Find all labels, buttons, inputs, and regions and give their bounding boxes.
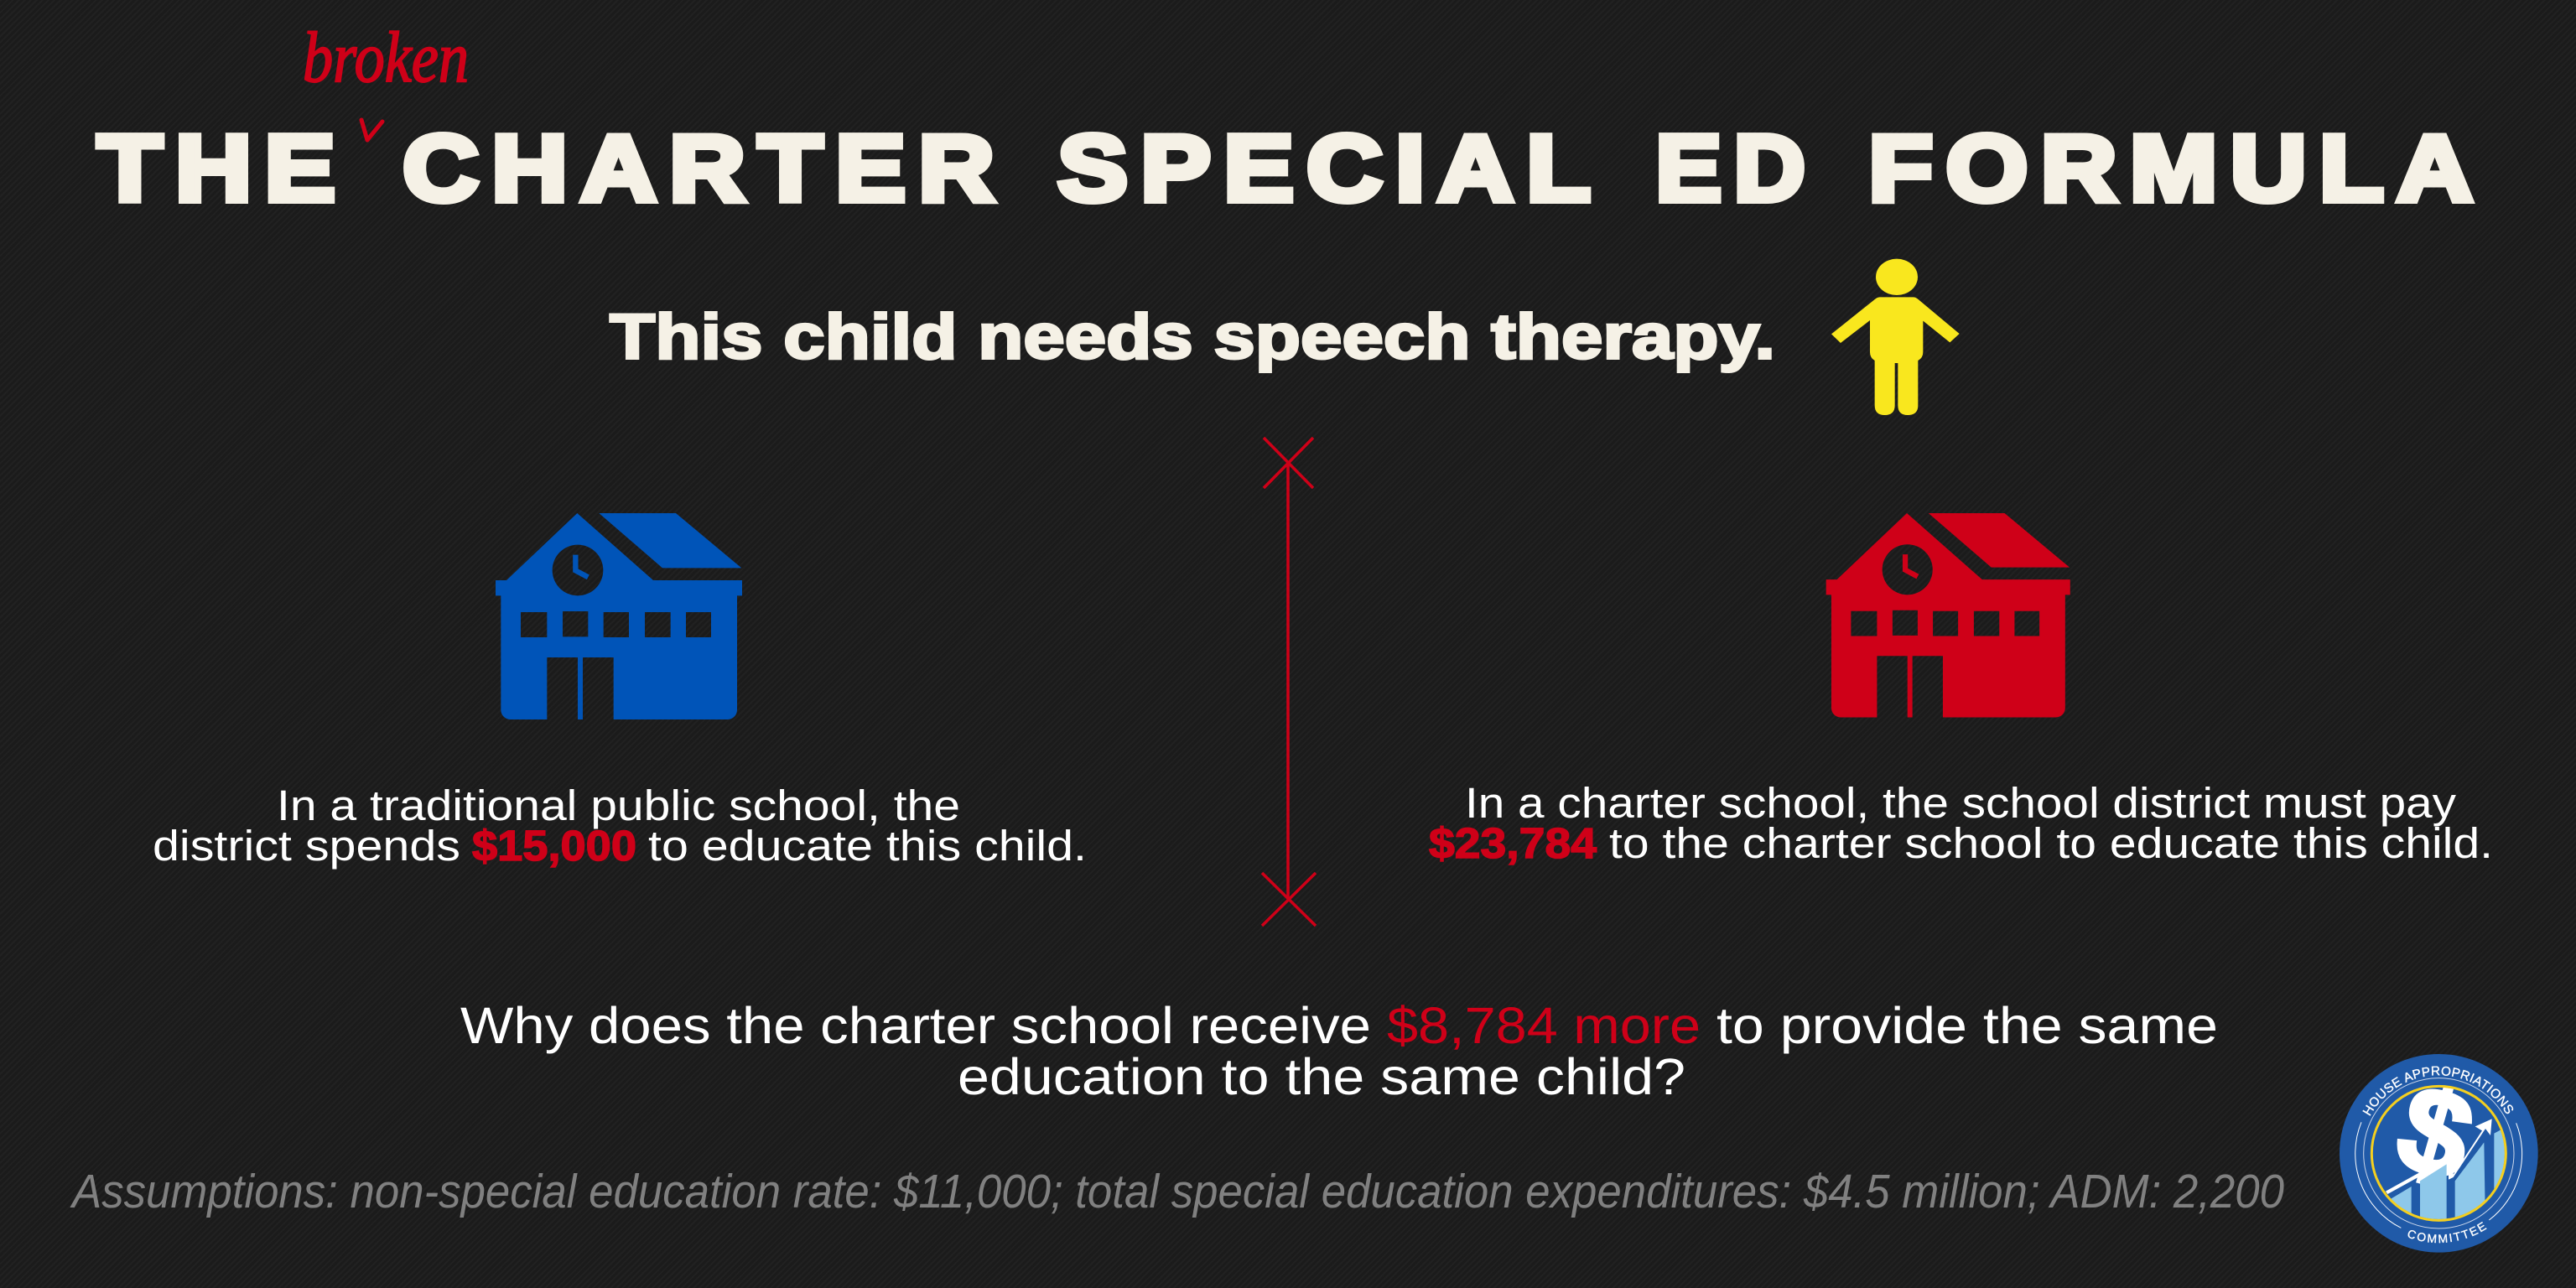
- text: charter school: In a charter school, the school district must pay: [1465, 779, 2457, 827]
- text: traditional public school: $15,000: [472, 822, 636, 870]
- text: charter school: $23,784: [1429, 819, 1597, 867]
- title: CHARTER: [402, 117, 1008, 221]
- question text: [460, 997, 2218, 1105]
- divider: vertical line with crosses: [1262, 438, 1316, 926]
- icon: blue school building: [496, 513, 742, 719]
- text: traditional public school: [153, 782, 1087, 870]
- text: traditional public school: In a traditional public school, the: [277, 782, 960, 829]
- icon: red school building: [1826, 513, 2070, 718]
- question text: Why does the charter school receive: [460, 997, 1371, 1054]
- question text: $8,784 more: [1387, 997, 1701, 1054]
- text: charter school: to the charter school to educate this child.: [1609, 819, 2493, 867]
- question text: education to the same child?: [958, 1048, 1685, 1105]
- text: traditional public school: district spends: [153, 822, 460, 870]
- logo: House Appropriations Committee: HOUSE APPROPRIATIONS: [2362, 1067, 2514, 1116]
- logo: House Appropriations Committee: COMMITTEE: [2408, 1221, 2487, 1243]
- title: ED: [1655, 117, 1818, 221]
- icon: child: [1831, 259, 1960, 415]
- logo: House Appropriations Committee: [2340, 1054, 2538, 1253]
- assumptions footnote: Assumptions: non-special education rate: $11,000; total special education expenditures: $4.5 million; ADM: 2,200: [70, 1165, 2284, 1218]
- text: charter school: [1429, 779, 2493, 867]
- title: FORMULA: [1868, 117, 2485, 221]
- logo: House Appropriations Committee: $: [2383, 1057, 2487, 1208]
- subtitle: This child needs speech therapy.: [610, 302, 1775, 372]
- title: THE: [97, 117, 349, 221]
- handwritten insertion: broken: broken: [303, 17, 469, 97]
- question text: to provide the same: [1716, 997, 2218, 1054]
- title: [97, 117, 2485, 221]
- title: SPECIAL: [1058, 117, 1603, 221]
- insertion caret: [361, 120, 382, 140]
- text: traditional public school: to educate this child.: [648, 822, 1087, 870]
